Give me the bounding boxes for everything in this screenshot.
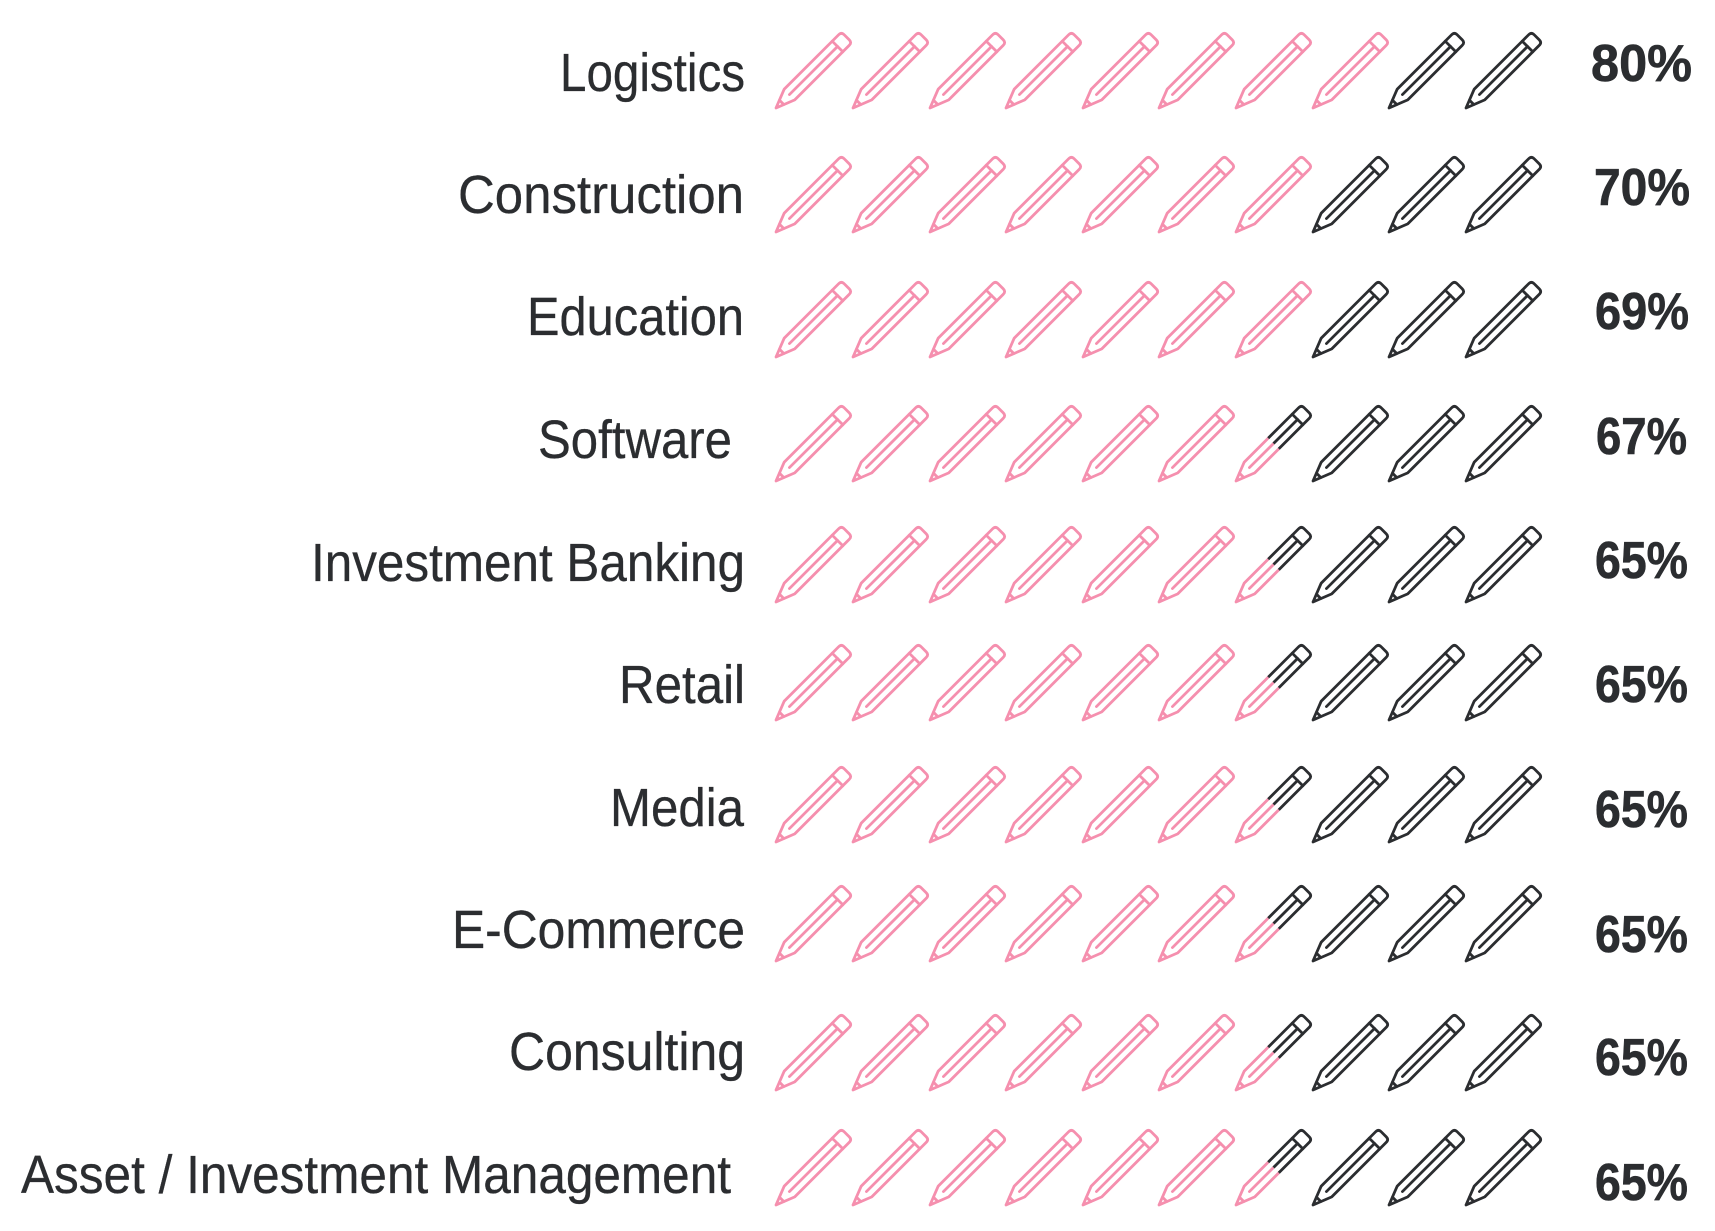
pencil icons: 6.5 of 10 pink [771,766,1542,847]
value: 69%: 69% [1595,283,1689,341]
row: Consulting 65% [509,1014,1688,1095]
row: E-Commerce 65% [452,885,1688,966]
pencil icons: 6.5 of 10 pink [771,1014,1542,1095]
label: Retail: Retail [619,655,745,715]
pencil icons: 6.5 of 10 pink [771,1129,1542,1210]
row: Education 69% [527,281,1689,362]
row: Construction 70% [458,156,1690,237]
value: 65%: 65% [1595,1029,1688,1087]
pencil icons: 7 of 10 pink [771,281,1542,362]
value: 65%: 65% [1595,656,1688,714]
row: Investment Banking 65% [311,526,1688,607]
label: Logistics: Logistics [560,43,745,103]
pencil icons: 6.5 of 10 pink [771,526,1542,607]
label: Media: Media [610,778,745,838]
pencil icons: 8 of 10 pink [771,32,1542,113]
value: 65%: 65% [1595,781,1688,839]
pencil icons: 6.5 of 10 pink [771,405,1542,486]
label: Software: Software [538,410,732,470]
value: 65%: 65% [1595,906,1688,964]
pencil icons: 7 of 10 pink [771,156,1542,237]
pencil icons: 6.5 of 10 pink [771,885,1542,966]
row: Asset / Investment Management 65% [21,1129,1688,1212]
row: Software 67% [538,405,1687,486]
value: 65%: 65% [1595,532,1688,590]
value: 80%: 80% [1591,35,1692,93]
pencil icons: 6.5 of 10 pink [771,644,1542,725]
label: Asset / Investment Management: Asset / Investment Management [21,1145,731,1205]
label: Consulting: Consulting [509,1022,745,1082]
row: Logistics 80% [560,32,1692,113]
label: Education: Education [527,287,744,347]
value: 65%: 65% [1595,1154,1688,1212]
value: 67%: 67% [1596,408,1687,466]
label: E-Commerce: E-Commerce [452,900,745,960]
row: Media 65% [610,766,1688,847]
label: Construction: Construction [458,165,744,225]
row: Retail 65% [619,644,1688,725]
label: Investment Banking: Investment Banking [311,533,745,593]
value: 70%: 70% [1594,159,1690,217]
